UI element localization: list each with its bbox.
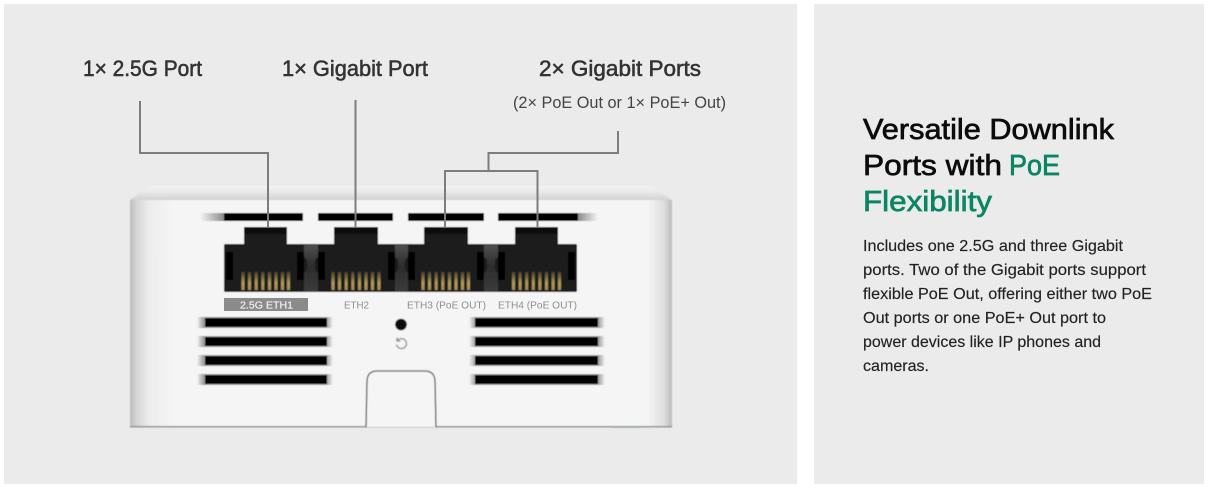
description text: Out ports or one PoE+ Out port to — [863, 310, 1106, 327]
icon: reset — [396, 338, 406, 349]
device top bevel — [130, 186, 672, 200]
port label: 2.5G ETH1 — [224, 298, 308, 312]
upper vent slots — [200, 213, 598, 221]
port label: ETH2: ETH2 — [344, 300, 369, 312]
description text: Includes one 2.5G and three Gigabit — [863, 238, 1124, 255]
heading: Versatile Downlink — [863, 114, 1115, 146]
description text: power devices like IP phones and — [863, 334, 1101, 351]
gold pins — [242, 272, 561, 290]
callout: 2x gigabit ports: (2× PoE Out or 1× PoE+ Out) — [513, 93, 726, 112]
heading — [863, 114, 1115, 218]
heading: Ports with — [863, 150, 1002, 182]
callout: 2x gigabit ports — [445, 56, 726, 227]
panel: description — [814, 4, 1204, 484]
callout: 1x 2.5G port — [83, 56, 268, 227]
device bottom edge — [130, 426, 672, 427]
device: wall-plate access point — [130, 186, 672, 428]
heading: Flexibility — [863, 186, 993, 218]
callout: 2x gigabit ports: 2× Gigabit Ports — [539, 56, 701, 81]
ethernet port block — [224, 227, 577, 292]
callout: 1x gigabit port: 1× Gigabit Port — [282, 56, 428, 81]
heading: PoE — [1009, 150, 1060, 182]
status LED hole — [395, 319, 407, 330]
right vent slots — [469, 317, 605, 385]
description text: ports. Two of the Gigabit ports support — [863, 262, 1147, 279]
port label: ETH4: ETH4 (PoE OUT) — [498, 300, 577, 312]
mounting tab notch — [366, 371, 436, 427]
description text: flexible PoE Out, offering either two PoE — [863, 286, 1152, 303]
device body — [130, 200, 672, 427]
panel: device illustration — [4, 4, 797, 484]
port label: ETH3: ETH3 (PoE OUT) — [407, 300, 486, 312]
description text — [863, 238, 1152, 375]
bottom green edge mark — [613, 427, 641, 428]
port label: 2.5G ETH1: 2.5G ETH1 — [240, 300, 293, 312]
callout: 1x 2.5G port: 1× 2.5G Port — [83, 56, 202, 81]
left vent slots — [197, 317, 333, 385]
description text: cameras. — [863, 358, 929, 375]
